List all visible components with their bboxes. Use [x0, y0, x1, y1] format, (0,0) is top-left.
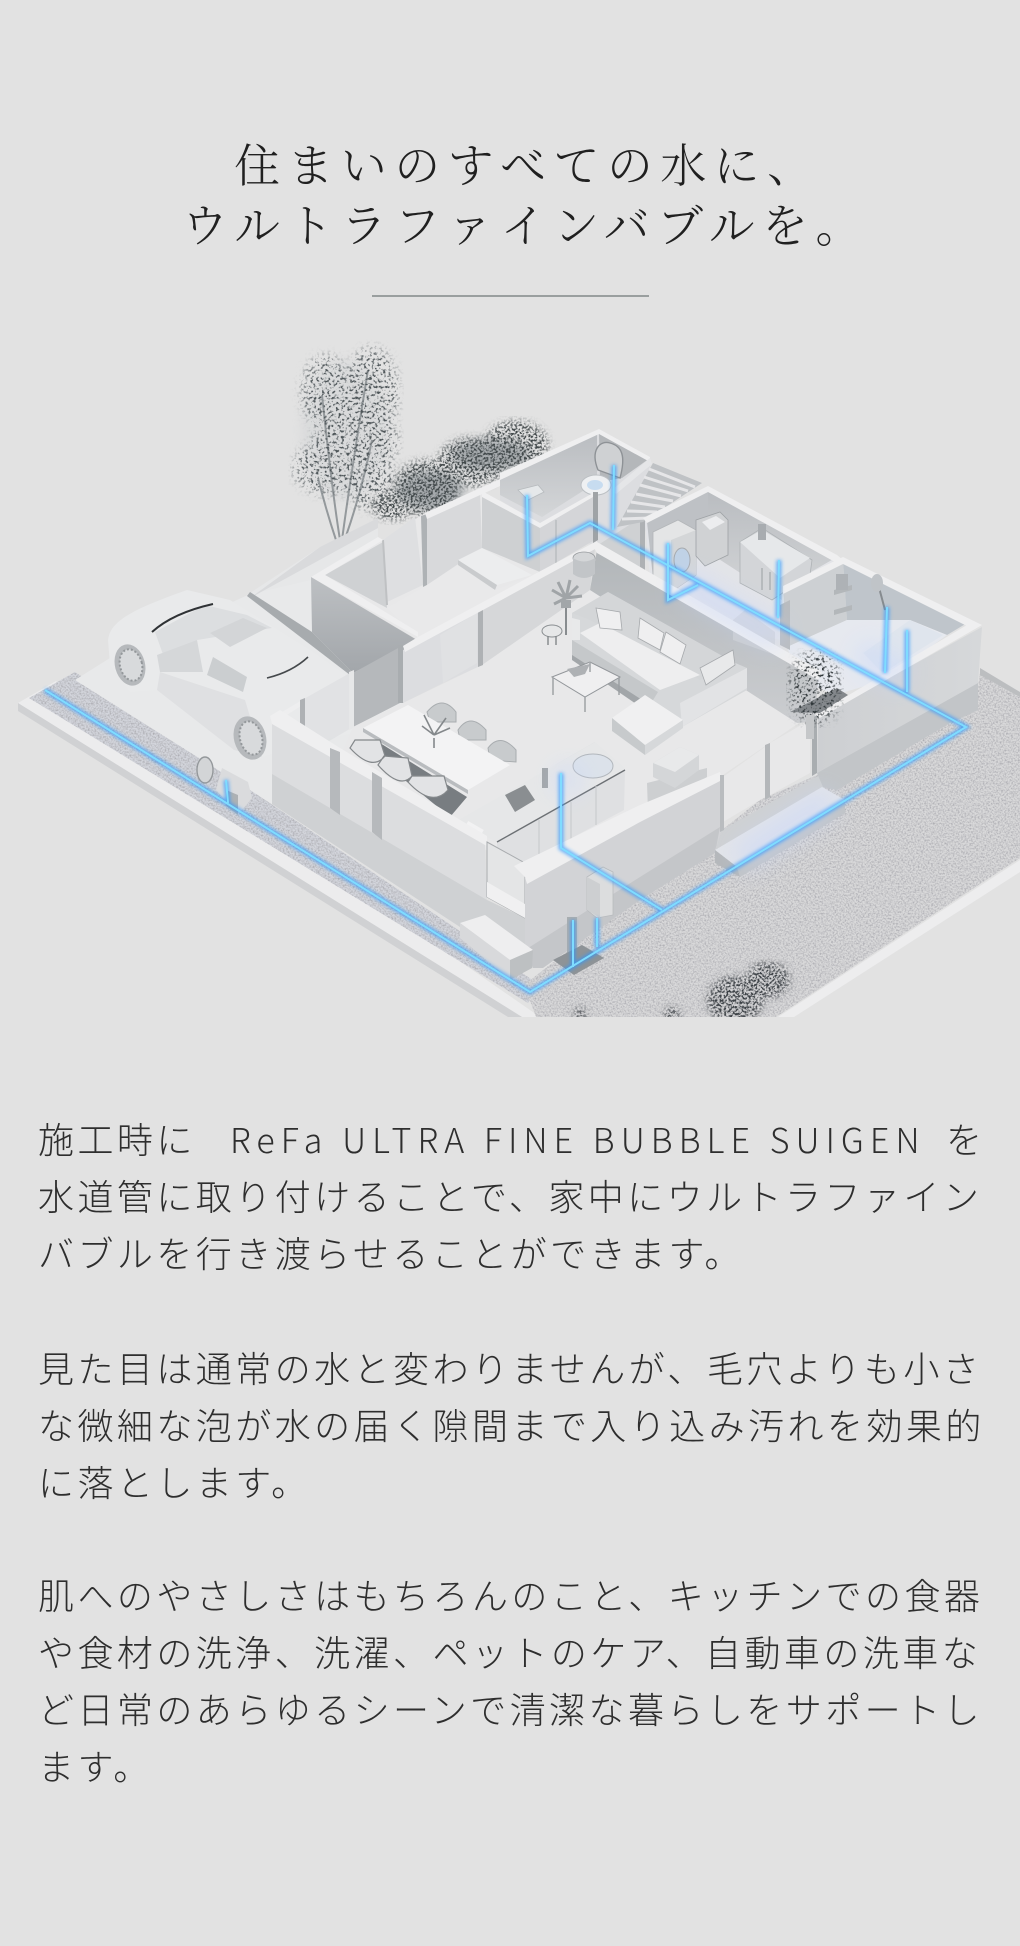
car [108, 590, 308, 760]
entrance storage block [647, 755, 707, 802]
paragraph: installation: 施工時に [38, 1112, 196, 1164]
hedge [372, 421, 548, 520]
water pipes [45, 465, 966, 992]
paragraph: installation: を [946, 1112, 985, 1164]
paragraph: fine bubbles: 見た目は通常の水と変わりませんが、毛穴よりも小さ [38, 1341, 982, 1393]
title: 住まいのすべての水に、 [234, 130, 820, 196]
front left exterior wall [270, 710, 533, 968]
title: ウルトラファインバブルを。 [182, 190, 869, 256]
kitchen counter [467, 754, 626, 861]
dining set [350, 703, 516, 817]
isometric house illustration [18, 342, 1020, 1017]
side table [542, 625, 562, 645]
water pipe glow [45, 465, 966, 992]
divider rule under title [372, 295, 649, 297]
paragraph: fine bubbles: な微細な泡が水の届く隙間まで入り込み汚れを効果的 [38, 1398, 985, 1450]
main floor of living and dining [404, 702, 405, 703]
potted plant by sofa [552, 580, 582, 635]
garden tap [197, 757, 252, 815]
stairs [617, 463, 702, 527]
courtyard plant [789, 652, 848, 739]
utility meter box [553, 867, 613, 975]
driveway and paths [75, 518, 378, 796]
paragraph: everyday uses: ます。 [38, 1739, 153, 1791]
paragraph: fine bubbles [38, 1341, 985, 1507]
corridor wall [482, 542, 822, 723]
laundry room [644, 486, 840, 600]
paragraph: fine bubbles: に落とします。 [38, 1455, 311, 1507]
entrance near wall [403, 541, 597, 703]
hall floor and corridor [600, 520, 645, 570]
tree [294, 348, 398, 540]
title [182, 130, 869, 256]
paragraph: everyday uses: や食材の洗浄、洗濯、ペットのケア、自動車の洗車な [38, 1625, 981, 1677]
bathroom [783, 557, 982, 695]
coffee table [552, 662, 620, 712]
glass partition by garage [300, 647, 404, 736]
paragraph: installation: バブルを行き渡らせることができます。 [38, 1226, 744, 1278]
floor lamp [573, 552, 595, 578]
paragraph: installation: 水道管に取り付けることで、家中にウルトラファイン [38, 1169, 982, 1221]
sofa [572, 592, 747, 755]
paragraph: installation [38, 1112, 985, 1278]
step blocks [460, 787, 845, 980]
paragraph: everyday uses: 肌へのやさしさはもちろんのこと、キッチンでの食器 [38, 1568, 983, 1620]
paragraph: installation: ReFa ULTRA FINE BUBBLE SUIGEN [230, 1114, 926, 1163]
bush on gravel [574, 962, 790, 1024]
paragraph: everyday uses: ど日常のあらゆるシーンで清潔な暮らしをサポートし [38, 1682, 983, 1734]
toilet room [482, 429, 652, 572]
entrance room [247, 470, 540, 675]
front right exterior wall [514, 625, 982, 968]
ground plate with rim [18, 668, 1020, 1017]
